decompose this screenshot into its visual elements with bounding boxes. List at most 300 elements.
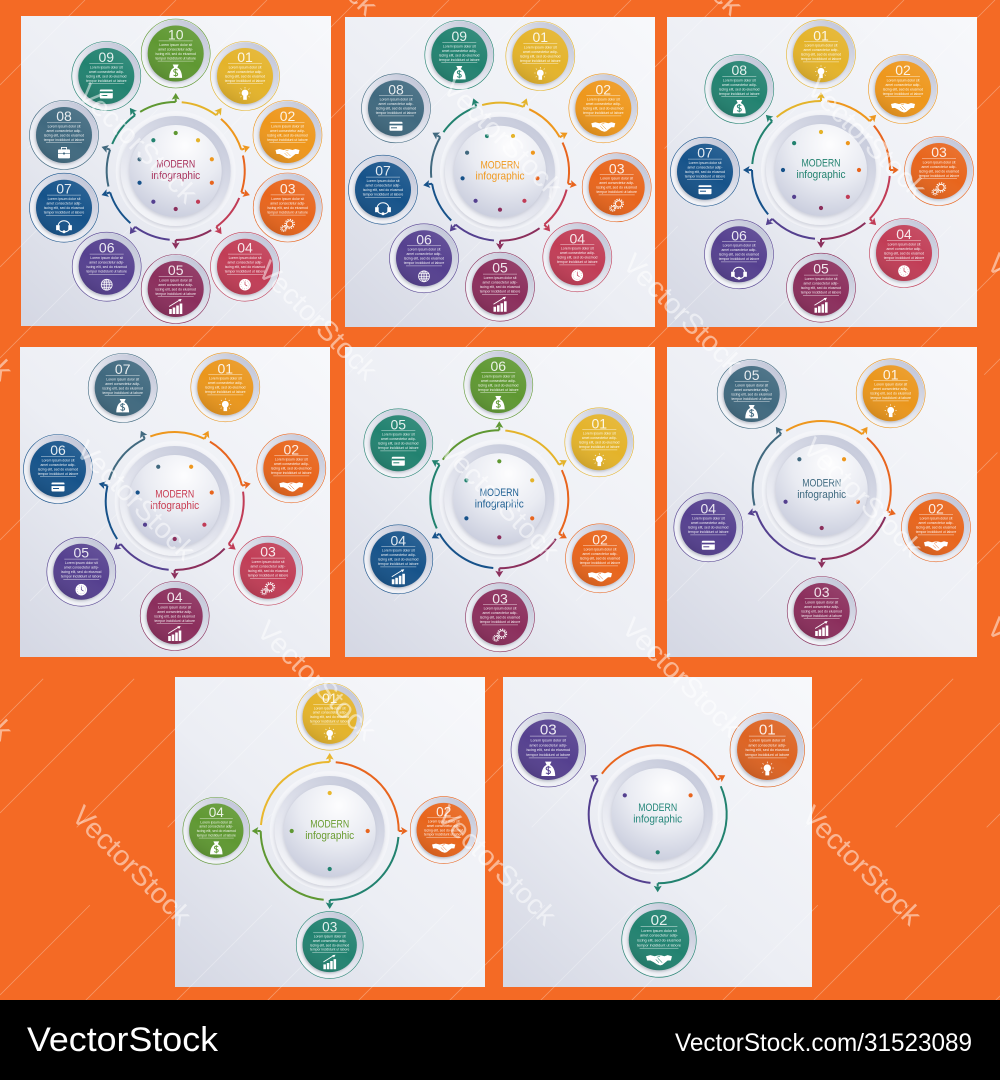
bubble 01 bbox=[296, 683, 363, 750]
bubble 03: 03 bbox=[814, 584, 830, 600]
bubble 03 bbox=[466, 583, 534, 652]
bubble 05: tempor incididunt ut labore bbox=[731, 397, 772, 401]
bubble 04: iscing elit, sed do eiusmod bbox=[225, 265, 265, 269]
bubble 05: tempor incididunt ut labore bbox=[801, 291, 841, 295]
bubble 06: tempor incididunt ut labore bbox=[86, 270, 127, 274]
bubble 02 bbox=[569, 74, 638, 143]
center title: infographic bbox=[151, 170, 201, 182]
bubble 01: tempor incididunt ut labore bbox=[801, 57, 841, 61]
bubble 01 bbox=[856, 359, 925, 428]
bubble 03: iscing elit, sed do eiusmod bbox=[802, 609, 842, 613]
bubble 07: 07 bbox=[697, 145, 713, 161]
bubble 04 bbox=[543, 223, 612, 292]
bubble 04 bbox=[674, 493, 743, 562]
bubble 09: Lorem ipsum dolor sit bbox=[90, 65, 123, 69]
panel: 6-step infographic bbox=[364, 350, 634, 652]
bubble 04: tempor incididunt ut labore bbox=[688, 530, 729, 534]
bubble 03: amet consectetur adip- bbox=[599, 181, 634, 185]
bubble 08: Lorem ipsum dolor sit bbox=[723, 78, 756, 82]
bubble 07: amet consectetur adip- bbox=[47, 202, 81, 206]
bubble 02: amet consectetur adip- bbox=[274, 462, 309, 466]
bubble 06: 06 bbox=[731, 227, 747, 243]
watermarks: VectorStock bbox=[437, 72, 569, 204]
bubble 01: tempor incididunt ut labore bbox=[310, 719, 349, 723]
bubble 02: Lorem ipsum dolor sit bbox=[920, 517, 952, 521]
watermarks: VectorStock bbox=[796, 800, 928, 932]
bubble 01: amet consectetur adip- bbox=[582, 436, 617, 440]
bubble 05: 05 bbox=[744, 367, 760, 383]
bubble 02 bbox=[622, 903, 696, 977]
bubble 01: tempor incididunt ut labore bbox=[225, 79, 265, 83]
bubble 04: amet consectetur adip- bbox=[228, 261, 262, 265]
bubble 03: 03 bbox=[492, 590, 508, 606]
bubble 01: 01 bbox=[237, 49, 253, 65]
bubble 08 bbox=[705, 54, 774, 124]
bubble 07: iscing elit, sed do eiusmod bbox=[685, 170, 725, 174]
bubble 04 bbox=[364, 525, 433, 594]
bubble 02: iscing elit, sed do eiusmod bbox=[271, 467, 312, 471]
watermarks: VectorStock bbox=[434, 435, 566, 567]
bubble 01: Lorem ipsum dolor sit bbox=[524, 45, 557, 49]
bubble 08: iscing elit, sed do eiusmod bbox=[719, 87, 760, 91]
bubble 08: tempor incididunt ut labore bbox=[376, 111, 416, 115]
bubble 04: tempor incididunt ut labore bbox=[884, 256, 924, 260]
center title: MODERN bbox=[310, 819, 349, 831]
bubble 04: tempor incididunt ut labore bbox=[225, 270, 265, 274]
bubble 04: amet consectetur adip- bbox=[887, 247, 921, 251]
bubble 02: iscing elit, sed do eiusmod bbox=[580, 557, 620, 561]
bubble 02: iscing elit, sed do eiusmod bbox=[637, 939, 681, 943]
bubble 03: Lorem ipsum dolor sit bbox=[531, 738, 566, 742]
bubble 01 bbox=[786, 20, 856, 89]
bubble 06: tempor incididunt ut labore bbox=[719, 257, 759, 261]
bubble 04: tempor incididunt ut labore bbox=[197, 833, 236, 837]
bubble 04: 04 bbox=[391, 532, 406, 548]
arc segments bbox=[533, 690, 782, 939]
bubble 02: tempor incididunt ut labore bbox=[637, 943, 681, 947]
bubble 07: Lorem ipsum dolor sit bbox=[48, 197, 80, 201]
bubble 07: tempor incididunt ut labore bbox=[102, 391, 143, 395]
arc segments bbox=[695, 364, 948, 616]
bubble 05: Lorem ipsum dolor sit bbox=[484, 276, 516, 280]
bubble 02: tempor incididunt ut labore bbox=[580, 561, 620, 565]
bubble 04 bbox=[210, 232, 280, 301]
bubble 06: amet consectetur adip- bbox=[41, 463, 75, 467]
bubble 04: Lorem ipsum dolor sit bbox=[888, 242, 920, 246]
bubble 04: Lorem ipsum dolor sit bbox=[561, 247, 594, 251]
bubble 05: amet consectetur adip- bbox=[804, 282, 838, 286]
bubble 01 bbox=[506, 22, 575, 90]
bubble 04: Lorem ipsum dolor sit bbox=[200, 820, 232, 824]
bubble 03 bbox=[582, 153, 651, 222]
bubble 03: tempor incididunt ut labore bbox=[310, 948, 349, 952]
bubble 02: amet consectetur adip- bbox=[586, 102, 621, 106]
bubble 04 bbox=[870, 218, 938, 288]
bubble 10: amet consectetur adip- bbox=[158, 47, 193, 51]
bubble 03: amet consectetur adip- bbox=[251, 565, 285, 569]
watermarks: VectorStock bbox=[72, 78, 204, 210]
bubble 02: 02 bbox=[651, 912, 667, 929]
bubble 02: 02 bbox=[436, 804, 451, 819]
bubble 08: amet consectetur adip- bbox=[379, 102, 413, 106]
bubble 10 bbox=[141, 19, 210, 88]
bubble 06 bbox=[464, 350, 533, 420]
center title: infographic bbox=[150, 500, 200, 512]
bubble 03: Lorem ipsum dolor sit bbox=[484, 607, 516, 611]
bubble 07: tempor incididunt ut labore bbox=[685, 175, 725, 179]
watermarks: VectorStock bbox=[617, 248, 749, 380]
bubble 01 bbox=[730, 712, 805, 787]
bubble 03: iscing elit, sed do eiusmod bbox=[248, 569, 288, 573]
bubble 06: 06 bbox=[416, 231, 432, 247]
bubble 04: 04 bbox=[570, 230, 585, 246]
bubble 03: tempor incididunt ut labore bbox=[480, 620, 520, 624]
bubble 07: 07 bbox=[375, 163, 391, 179]
ring diagram 4 steps bbox=[252, 753, 408, 909]
bubble 03: 03 bbox=[260, 544, 276, 560]
bubble 08: 08 bbox=[388, 81, 404, 97]
bubble 04: 04 bbox=[237, 240, 253, 256]
bubble 05: amet consectetur adip- bbox=[483, 281, 517, 285]
bubble 01: tempor incididunt ut labore bbox=[870, 396, 911, 400]
bubble 01: 01 bbox=[322, 691, 337, 706]
bubble 05: 05 bbox=[492, 260, 508, 276]
bubble 01: tempor incididunt ut labore bbox=[579, 445, 620, 449]
bubble 06: iscing elit, sed do eiusmod bbox=[478, 383, 519, 387]
bubble 03 bbox=[253, 173, 322, 242]
bubble 01: Lorem ipsum dolor sit bbox=[209, 377, 242, 381]
bubble 07 bbox=[670, 137, 740, 206]
bubble 09: amet consectetur adip- bbox=[442, 49, 477, 53]
bubble 10: 10 bbox=[168, 26, 184, 42]
footer image id: VectorStock.com/31523089 bbox=[675, 1029, 972, 1057]
bubble 09: iscing elit, sed do eiusmod bbox=[439, 53, 480, 57]
bubble 08: amet consectetur adip- bbox=[47, 129, 81, 133]
arc segments bbox=[368, 368, 631, 631]
bubble 03: 03 bbox=[322, 919, 337, 934]
watermarks: VectorStock bbox=[70, 435, 202, 567]
bubble 03: iscing elit, sed do eiusmod bbox=[526, 748, 570, 752]
ring diagram 7 steps bbox=[38, 364, 312, 638]
bubble 09: tempor incididunt ut labore bbox=[86, 79, 127, 83]
bubble 06: Lorem ipsum dolor sit bbox=[408, 248, 440, 252]
bubble 06: 06 bbox=[99, 240, 115, 256]
bubble 02: amet consectetur adip- bbox=[270, 129, 305, 133]
bubble 03: tempor incididunt ut labore bbox=[596, 190, 637, 194]
bubble 05: 05 bbox=[74, 545, 89, 561]
bubble 03: amet consectetur adip- bbox=[270, 201, 305, 205]
bubble 03: iscing elit, sed do eiusmod bbox=[597, 186, 637, 190]
arc segments bbox=[365, 36, 635, 307]
bubble 05: amet consectetur adip- bbox=[734, 388, 769, 392]
bubble 01: amet consectetur adip- bbox=[228, 70, 262, 74]
bubble 05 bbox=[47, 537, 116, 606]
bubble 02: 02 bbox=[928, 500, 944, 516]
bubble 05: 05 bbox=[168, 262, 184, 278]
bubble 06: iscing elit, sed do eiusmod bbox=[38, 467, 78, 471]
watermarks: VectorStock bbox=[431, 800, 563, 932]
bubble 01: amet consectetur adip- bbox=[748, 743, 787, 747]
bubble 01: 01 bbox=[759, 722, 776, 739]
center title: MODERN bbox=[155, 489, 194, 501]
bubble 04: iscing elit, sed do eiusmod bbox=[688, 526, 729, 530]
bubble 01: tempor incididunt ut labore bbox=[520, 59, 561, 63]
bubble 05: Lorem ipsum dolor sit bbox=[65, 561, 98, 565]
bubble 04: amet consectetur adip- bbox=[691, 521, 726, 525]
bubble 05 bbox=[141, 254, 210, 324]
bubble 01 bbox=[210, 42, 280, 110]
center title: MODERN bbox=[480, 159, 520, 171]
bubble 03: tempor incididunt ut labore bbox=[248, 574, 288, 578]
bubble 01: Lorem ipsum dolor sit bbox=[229, 65, 261, 69]
bubble 06: iscing elit, sed do eiusmod bbox=[719, 253, 759, 257]
center title: infographic bbox=[475, 498, 524, 510]
bubble 05: amet consectetur adip- bbox=[158, 283, 193, 287]
bubble 05: amet consectetur adip- bbox=[381, 437, 416, 441]
bubble 06: Lorem ipsum dolor sit bbox=[482, 374, 515, 378]
bubble 02: Lorem ipsum dolor sit bbox=[428, 820, 460, 824]
bubble 02: Lorem ipsum dolor sit bbox=[641, 929, 677, 933]
bubble 02: amet consectetur adip- bbox=[583, 552, 617, 556]
ring diagram 8 steps bbox=[684, 33, 958, 307]
bubble 05: tempor incididunt ut labore bbox=[155, 292, 196, 296]
bubble 02: iscing elit, sed do eiusmod bbox=[424, 828, 463, 832]
bubble 06: amet consectetur adip- bbox=[407, 252, 441, 256]
bubble 02: Lorem ipsum dolor sit bbox=[275, 458, 308, 462]
bubble 04 bbox=[183, 797, 250, 864]
bubble 05 bbox=[466, 252, 534, 321]
bubble 03: iscing elit, sed do eiusmod bbox=[268, 206, 308, 210]
center title: MODERN bbox=[802, 158, 841, 170]
bubble 01: amet consectetur adip- bbox=[313, 711, 347, 715]
bubble 03: amet consectetur adip- bbox=[483, 611, 517, 615]
bubble 01: 01 bbox=[883, 366, 899, 382]
bubble 03: iscing elit, sed do eiusmod bbox=[919, 169, 959, 173]
bubble 08: amet consectetur adip- bbox=[722, 83, 757, 87]
bubble 02: amet consectetur adip- bbox=[427, 824, 461, 828]
arc segments bbox=[38, 364, 312, 638]
bubble 01: iscing elit, sed do eiusmod bbox=[225, 74, 265, 78]
bubble 02: 02 bbox=[592, 531, 608, 547]
bubble 03 bbox=[904, 136, 974, 206]
panel: 7-step infographic bbox=[24, 353, 326, 650]
bubble 02: 02 bbox=[280, 108, 295, 124]
bubble 07: amet consectetur adip- bbox=[688, 166, 722, 170]
bubble 03: amet consectetur adip- bbox=[313, 939, 347, 943]
bubble 06: tempor incididunt ut labore bbox=[404, 261, 444, 265]
bubble 10: Lorem ipsum dolor sit bbox=[159, 43, 192, 47]
bubble 02: tempor incididunt ut labore bbox=[271, 471, 312, 475]
bubble 03: Lorem ipsum dolor sit bbox=[923, 160, 955, 164]
bubble 08: 08 bbox=[732, 62, 747, 78]
bubble 02: 02 bbox=[596, 81, 611, 97]
bubble 03: Lorem ipsum dolor sit bbox=[805, 600, 838, 604]
bubble 07 bbox=[348, 155, 418, 224]
bubble 07: iscing elit, sed do eiusmod bbox=[103, 386, 143, 390]
bubble 03: Lorem ipsum dolor sit bbox=[600, 177, 633, 181]
center title: infographic bbox=[305, 830, 355, 842]
bubble 05: Lorem ipsum dolor sit bbox=[382, 433, 415, 437]
bubble 02: amet consectetur adip- bbox=[919, 521, 953, 525]
bubble 07: tempor incididunt ut labore bbox=[44, 211, 84, 215]
bubble 05: tempor incididunt ut labore bbox=[480, 290, 520, 294]
bubble 01: iscing elit, sed do eiusmod bbox=[871, 392, 911, 396]
bubble 08 bbox=[362, 74, 430, 143]
panel: 3-step infographic bbox=[511, 690, 805, 977]
arc segments bbox=[252, 753, 408, 909]
bubble 04: Lorem ipsum dolor sit bbox=[692, 517, 725, 521]
bubble 07 bbox=[88, 354, 157, 422]
bubble 01: iscing elit, sed do eiusmod bbox=[801, 53, 841, 57]
bubble 08 bbox=[30, 100, 98, 170]
bubble 05: iscing elit, sed do eiusmod bbox=[801, 286, 841, 290]
bubble 01 bbox=[191, 353, 260, 422]
bubble 06: amet consectetur adip- bbox=[89, 261, 124, 265]
bubble 02: Lorem ipsum dolor sit bbox=[584, 548, 616, 552]
bubble 03: tempor incididunt ut labore bbox=[919, 174, 959, 178]
center title: infographic bbox=[476, 171, 525, 183]
bubble 01: iscing elit, sed do eiusmod bbox=[310, 715, 349, 719]
bubble 02: Lorem ipsum dolor sit bbox=[887, 78, 919, 82]
bubble 02: tempor incididunt ut labore bbox=[267, 138, 308, 142]
panel: 10-step infographic bbox=[30, 19, 322, 324]
bubble 06: Lorem ipsum dolor sit bbox=[42, 458, 74, 462]
bubble 01: tempor incididunt ut labore bbox=[745, 753, 789, 757]
bubble 02 bbox=[257, 434, 326, 503]
bubble 09: 09 bbox=[452, 28, 467, 44]
bubble 01 bbox=[565, 408, 634, 477]
bubble 01: iscing elit, sed do eiusmod bbox=[745, 748, 789, 752]
bubble 03: 03 bbox=[540, 722, 557, 739]
bubble 02: tempor incididunt ut labore bbox=[883, 92, 923, 96]
bubble 01: Lorem ipsum dolor sit bbox=[314, 706, 346, 710]
bubble 04: tempor incididunt ut labore bbox=[557, 260, 598, 264]
bubble 05 bbox=[717, 360, 786, 428]
bubble 07: Lorem ipsum dolor sit bbox=[689, 161, 721, 165]
bubble 06 bbox=[72, 232, 141, 301]
bubble 07: 07 bbox=[115, 361, 131, 377]
bubble 01: amet consectetur adip- bbox=[208, 381, 243, 385]
bubble 03 bbox=[296, 912, 363, 978]
bubble 08: iscing elit, sed do eiusmod bbox=[44, 133, 84, 137]
bubble 03: amet consectetur adip- bbox=[529, 743, 568, 747]
bubble 06 bbox=[24, 434, 92, 504]
bubble 08: tempor incididunt ut labore bbox=[719, 92, 760, 96]
bubble 08: 08 bbox=[56, 108, 72, 124]
bubble 06: tempor incididunt ut labore bbox=[478, 388, 519, 392]
bubble 07: amet consectetur adip- bbox=[105, 382, 140, 386]
bubble 08: iscing elit, sed do eiusmod bbox=[376, 107, 416, 111]
bubble 09: iscing elit, sed do eiusmod bbox=[86, 74, 127, 78]
bubble 01: iscing elit, sed do eiusmod bbox=[205, 386, 246, 390]
bubble 02: tempor incididunt ut labore bbox=[916, 530, 956, 534]
bubble 02 bbox=[902, 493, 970, 562]
bubble 09: tempor incididunt ut labore bbox=[439, 58, 480, 62]
bubble 07: Lorem ipsum dolor sit bbox=[106, 377, 139, 381]
bubble 09 bbox=[425, 20, 494, 90]
bubble 04: tempor incididunt ut labore bbox=[378, 562, 419, 566]
bubble 04: iscing elit, sed do eiusmod bbox=[884, 251, 924, 255]
center title: MODERN bbox=[156, 159, 195, 171]
ring diagram 10 steps bbox=[43, 39, 308, 303]
bubble 04: Lorem ipsum dolor sit bbox=[158, 605, 191, 609]
bubble 02: iscing elit, sed do eiusmod bbox=[267, 133, 308, 137]
arc segments bbox=[43, 39, 308, 303]
bubble 05: Lorem ipsum dolor sit bbox=[159, 278, 192, 282]
bubble 03: Lorem ipsum dolor sit bbox=[271, 197, 304, 201]
ring diagram 6 steps bbox=[368, 368, 631, 631]
bubble 01: tempor incididunt ut labore bbox=[205, 390, 246, 394]
bubble 03: Lorem ipsum dolor sit bbox=[252, 560, 284, 564]
bubble 03: Lorem ipsum dolor sit bbox=[314, 935, 346, 939]
center title: MODERN bbox=[480, 487, 519, 499]
bubble 02: iscing elit, sed do eiusmod bbox=[883, 87, 923, 91]
bubble 05 bbox=[364, 409, 433, 478]
watermarks: VectorStock bbox=[801, 73, 933, 205]
bubble 01: iscing elit, sed do eiusmod bbox=[579, 441, 620, 445]
bubble 08: tempor incididunt ut labore bbox=[44, 138, 84, 142]
bubble 01: amet consectetur adip- bbox=[873, 387, 908, 391]
bubble 01: Lorem ipsum dolor sit bbox=[750, 738, 785, 742]
watermarks: VectorStock bbox=[251, 615, 383, 747]
bubble 05: iscing elit, sed do eiusmod bbox=[732, 392, 772, 396]
bubble 06: tempor incididunt ut labore bbox=[38, 472, 78, 476]
center title: MODERN bbox=[802, 478, 841, 490]
ring diagram 9 steps bbox=[365, 36, 635, 307]
center title: infographic bbox=[796, 169, 846, 181]
bubble 05: 05 bbox=[813, 261, 829, 277]
bubble 02 bbox=[566, 524, 634, 593]
bubble 06 bbox=[390, 224, 458, 293]
bubble 07: amet consectetur adip- bbox=[366, 184, 400, 188]
bubble 07: iscing elit, sed do eiusmod bbox=[44, 206, 84, 210]
bubble 06: Lorem ipsum dolor sit bbox=[723, 244, 755, 248]
bubble 09: amet consectetur adip- bbox=[89, 70, 124, 74]
center title: infographic bbox=[633, 813, 683, 825]
bubble 05: iscing elit, sed do eiusmod bbox=[480, 285, 520, 289]
bubble 03: amet consectetur adip- bbox=[804, 605, 839, 609]
bubble 03: 03 bbox=[609, 160, 625, 176]
ring diagram 3 steps bbox=[533, 690, 782, 939]
ring diagram 5 steps bbox=[695, 364, 948, 616]
arc segments bbox=[684, 33, 958, 307]
bubble 09 bbox=[72, 42, 141, 110]
bubble 04: iscing elit, sed do eiusmod bbox=[557, 256, 598, 260]
bubble 04: amet consectetur adip- bbox=[381, 553, 416, 557]
watermarks: VectorStock bbox=[616, 612, 748, 744]
bubble 01: Lorem ipsum dolor sit bbox=[805, 44, 837, 48]
bubble 07: Lorem ipsum dolor sit bbox=[367, 179, 399, 183]
bubble 02 bbox=[868, 54, 938, 124]
panel: 9-step infographic bbox=[348, 20, 651, 321]
bubble 02: 02 bbox=[284, 441, 299, 457]
bubble 04: tempor incididunt ut labore bbox=[154, 619, 195, 623]
panel: 5-step infographic bbox=[674, 359, 970, 646]
bubble 04: 04 bbox=[896, 226, 912, 242]
footer brand: VectorStock bbox=[27, 1021, 219, 1059]
bubble 04: amet consectetur adip- bbox=[157, 610, 192, 614]
bubble 09: Lorem ipsum dolor sit bbox=[443, 44, 476, 48]
bubble 04: iscing elit, sed do eiusmod bbox=[378, 558, 419, 562]
bubble 02: tempor incididunt ut labore bbox=[583, 111, 624, 115]
bubble 04: iscing elit, sed do eiusmod bbox=[197, 829, 236, 833]
bubble 05: iscing elit, sed do eiusmod bbox=[156, 287, 196, 291]
bubble 08: Lorem ipsum dolor sit bbox=[48, 124, 80, 128]
watermarks: VectorStock bbox=[66, 800, 198, 932]
center title: MODERN bbox=[638, 802, 677, 814]
bubble 04: amet consectetur adip- bbox=[560, 251, 595, 255]
bubble 06 bbox=[704, 220, 774, 289]
